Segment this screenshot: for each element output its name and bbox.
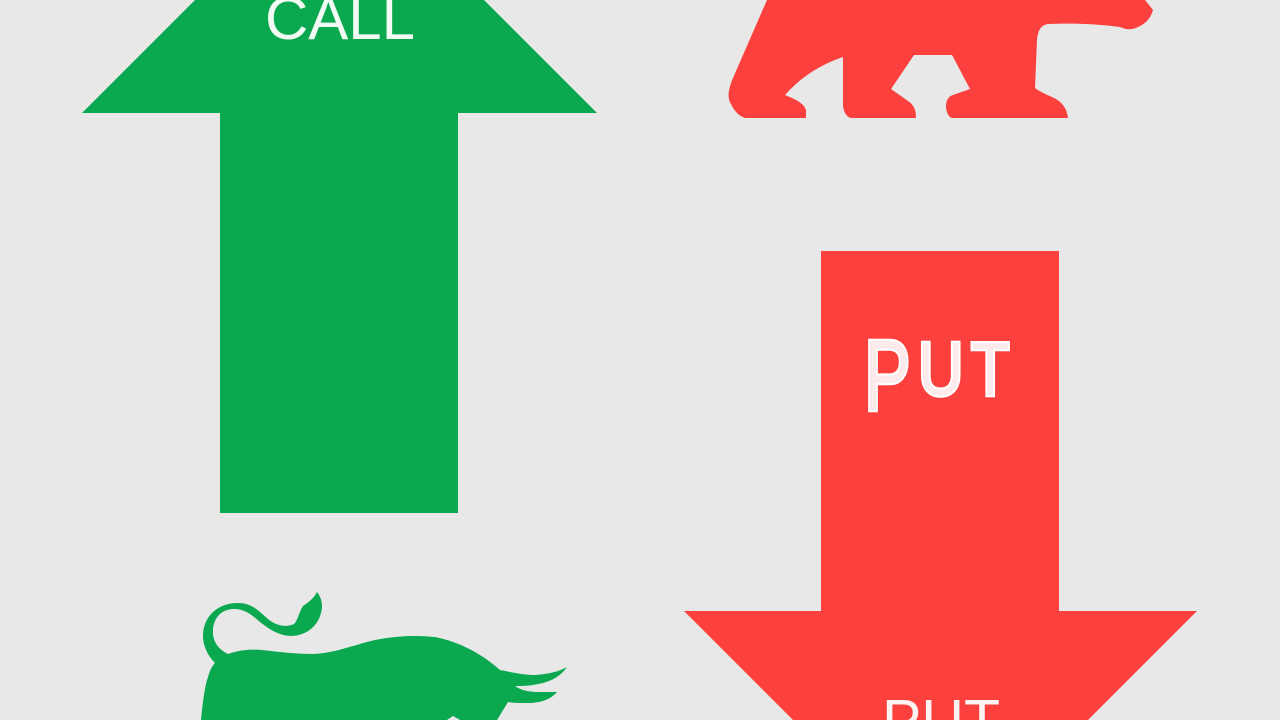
- icon: green bull: [201, 592, 567, 720]
- put label, stylised: U: [918, 327, 963, 411]
- call arrow: green up arrow: [82, 0, 597, 513]
- icon: red bear: [729, 0, 1153, 118]
- put label, stylised: P: [864, 321, 911, 432]
- put label, stylised: [864, 321, 1009, 432]
- put arrow: red down arrow: [684, 251, 1197, 720]
- put label, stylised: T: [971, 327, 1009, 411]
